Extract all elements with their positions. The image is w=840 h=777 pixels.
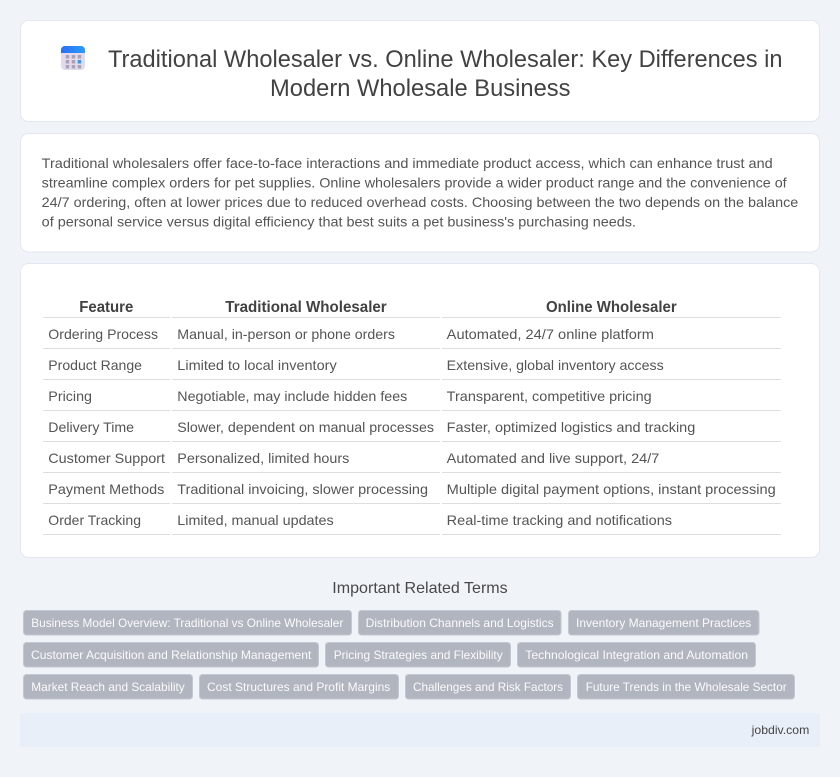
- title: [108, 46, 782, 102]
- tag: [518, 642, 756, 667]
- footer source label: jobdiv.com: [751, 723, 809, 737]
- tag: [24, 642, 318, 667]
- panel: comparison table: [20, 264, 820, 558]
- tag: [200, 674, 398, 699]
- table row: delivery time: Faster, optimized logistics and tracking: [447, 419, 695, 435]
- text block: introduction paragraph: [42, 155, 799, 230]
- tag: Future Trends in the Wholesale Sector: [586, 680, 787, 694]
- footer bar: [20, 713, 820, 747]
- tag: Inventory Management Practices: [576, 616, 751, 630]
- tag: Business Model Overview: Traditional vs Online Wholesaler: [31, 616, 343, 630]
- text block: introduction paragraph: of personal service versus digital efficiency that best suits a pet business's purchasing needs.: [42, 214, 636, 230]
- tag: Cost Structures and Profit Margins: [207, 680, 390, 694]
- table row: ordering process: Manual, in-person or phone orders: [177, 326, 395, 342]
- table row: product range: Product Range: [48, 357, 142, 373]
- tag: [326, 642, 510, 667]
- table row: customer support: [43, 450, 781, 473]
- table row: order tracking: Real-time tracking and notifications: [447, 512, 672, 528]
- title: Modern Wholesale Business: [270, 75, 570, 102]
- table row: payment methods: [43, 481, 781, 504]
- tag: [578, 674, 794, 699]
- table header row: Feature: [79, 299, 133, 316]
- table row: payment methods: Multiple digital payment options, instant processing: [447, 481, 776, 497]
- table row: customer support: Automated and live support, 24/7: [447, 450, 660, 466]
- table row: order tracking: Limited, manual updates: [177, 512, 334, 528]
- table row: pricing: [43, 388, 781, 411]
- panel: related term tags: [24, 610, 794, 699]
- title: Traditional Wholesaler vs. Online Wholesaler: Key Differences in: [108, 46, 782, 73]
- table row: customer support: Personalized, limited hours: [177, 450, 349, 466]
- table row: customer support: Customer Support: [48, 450, 165, 466]
- table header row: Traditional Wholesaler: [225, 299, 387, 316]
- panel: introduction: [20, 134, 820, 252]
- table row: product range: Extensive, global inventory access: [447, 357, 664, 373]
- table row: delivery time: [43, 419, 781, 442]
- tag: [24, 610, 352, 635]
- tag: Market Reach and Scalability: [31, 680, 185, 694]
- tag: Distribution Channels and Logistics: [366, 616, 554, 630]
- table row: delivery time: Slower, dependent on manual processes: [177, 419, 434, 435]
- tag: Technological Integration and Automation: [525, 648, 748, 662]
- tag: [406, 674, 570, 699]
- table row: pricing: Negotiable, may include hidden fees: [177, 388, 407, 404]
- table row: ordering process: [43, 326, 781, 349]
- table row: pricing: Pricing: [48, 388, 92, 404]
- table row: payment methods: Payment Methods: [48, 481, 164, 497]
- table row: product range: Limited to local inventory: [177, 357, 337, 373]
- tag: [568, 610, 759, 635]
- table row: order tracking: [43, 512, 781, 535]
- tag: Challenges and Risk Factors: [413, 680, 563, 694]
- table row: ordering process: Ordering Process: [48, 326, 158, 342]
- text block: introduction paragraph: 24/7 ordering, often at lower prices due to reduced overhead costs. Choosing between the two depends on the balance: [42, 194, 799, 210]
- tag: Pricing Strategies and Flexibility: [334, 648, 503, 662]
- table row: product range: [43, 357, 781, 380]
- table header row: [43, 299, 781, 318]
- table row: pricing: Transparent, competitive pricing: [447, 388, 652, 404]
- text block: introduction paragraph: streamline complex orders for pet supplies. Online wholesalers provide a wider product range and the convenience of: [42, 174, 787, 190]
- tag: [24, 674, 192, 699]
- tag: Customer Acquisition and Relationship Management: [31, 648, 312, 662]
- heading: important related terms: Important Related Terms: [332, 580, 508, 597]
- table header row: Online Wholesaler: [546, 299, 677, 316]
- panel: title header: [20, 20, 820, 122]
- tag: [358, 610, 561, 635]
- table row: order tracking: Order Tracking: [48, 512, 141, 528]
- table row: payment methods: Traditional invoicing, slower processing: [177, 481, 428, 497]
- table row: ordering process: Automated, 24/7 online platform: [447, 326, 654, 342]
- icon: calendar: [61, 46, 85, 70]
- table row: delivery time: Delivery Time: [48, 419, 134, 435]
- text block: introduction paragraph: Traditional wholesalers offer face-to-face interactions and immediate product access, which can enhance trust and: [42, 155, 773, 171]
